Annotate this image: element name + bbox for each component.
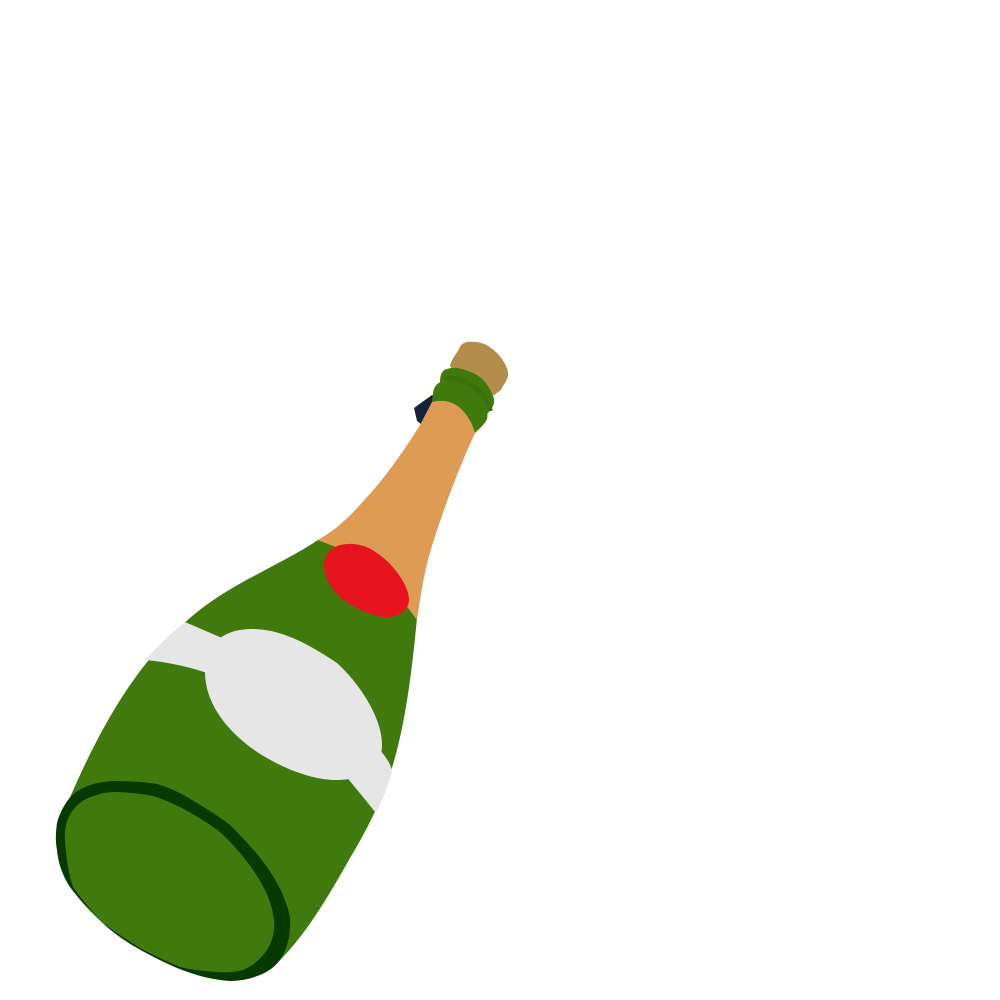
label band right: [345, 745, 392, 813]
red neck seal: [324, 544, 409, 617]
base inner face: [65, 792, 274, 972]
lower collar ring: [432, 381, 488, 433]
bottle base: [56, 781, 290, 981]
neck foil: [318, 401, 475, 620]
icon: dark foil tip behind neck: [414, 395, 440, 424]
upper collar ring: [440, 368, 494, 414]
collar shadow band: [444, 378, 490, 411]
main white label: [205, 629, 382, 780]
cork: [450, 342, 508, 405]
label band left: [145, 622, 222, 674]
base dark rim: [56, 781, 290, 981]
collar rings: [432, 368, 494, 433]
bottle body: [68, 540, 417, 962]
